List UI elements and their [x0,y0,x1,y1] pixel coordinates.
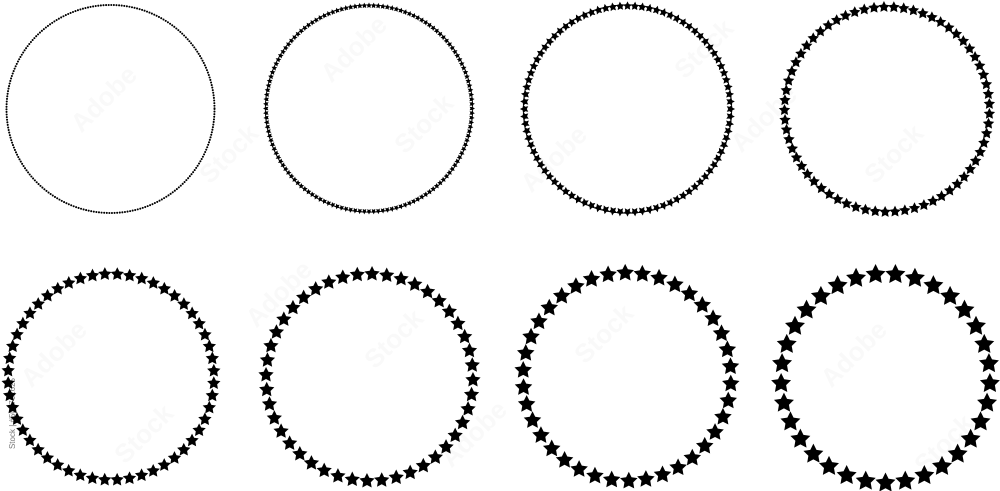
faint stock watermarks: Stock [858,118,930,189]
faint stock watermarks: Adobe [64,59,143,138]
faint stock watermarks: Stock [193,118,265,189]
ring 3: small stars [509,0,749,228]
faint stock watermarks: Adobe [724,79,803,158]
faint stock watermarks: Stock [668,13,740,84]
faint stock watermarks: Adobe [514,119,593,198]
faint stock watermarks: Stock [388,88,460,159]
ring 6: medium-large stars [258,266,481,487]
faint stock watermarks: Adobe [14,314,93,393]
stock image id label: Stock | #502762625 [8,377,17,449]
ring 7: large stars [514,264,740,488]
ring 2: very small stars [247,0,504,240]
faint stock watermarks: Adobe [434,394,513,473]
faint stock watermarks: Stock [908,408,980,479]
faint stock watermarks: Adobe [814,314,893,393]
faint stock watermarks: Stock [568,298,640,369]
ring 8: largest stars [771,264,1000,491]
ring 4: small-medium stars [779,1,995,217]
ring 1: tiny dotted circle [6,5,214,213]
faint stock watermarks: Adobe [239,254,318,333]
faint stock watermarks: Stock [108,398,180,469]
faint stock watermarks: Stock [358,303,430,374]
ring 5: medium stars [2,267,220,485]
faint stock watermarks: Adobe [314,9,393,88]
